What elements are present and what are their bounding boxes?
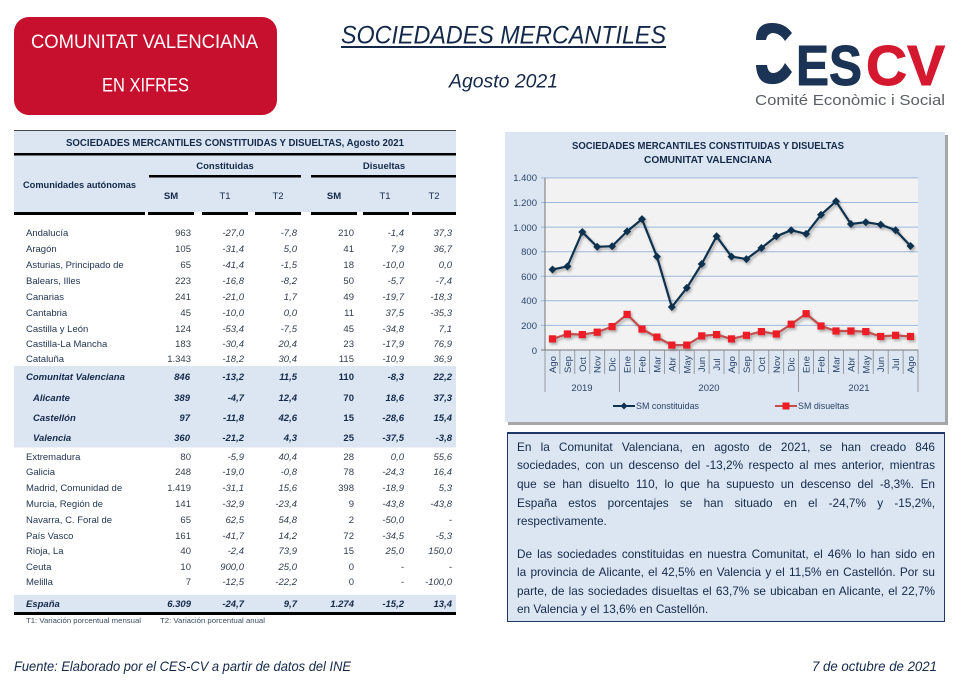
row: Castilla y León: -53,4 [222,324,244,335]
row: Galicia: -0,8 [281,467,298,478]
row: Valencia: 25 [343,433,355,444]
row: Ceuta: - [449,562,452,573]
row: Aragón: Aragón [26,244,57,255]
row: Cantabria [26,308,453,319]
table header: Constituidas [196,161,254,172]
row: Cataluña: Cataluña [26,354,65,365]
row: Extremadura: -5,9 [228,452,245,463]
row: Melilla [26,577,453,588]
row: Valencia: -37,5 [382,433,405,444]
row: Alicante: 12,4 [278,393,298,404]
row: Ceuta: 10 [180,562,191,573]
row: Galicia: -24,3 [382,467,405,478]
row: Valencia: -3,8 [436,433,453,444]
row: Canarias: 241 [175,292,191,303]
row: Andalucía: 963 [175,228,191,239]
row: Canarias [26,292,453,303]
row: España: 9,7 [284,599,298,610]
row: Castilla-La Mancha: -30,4 [222,339,244,350]
row: Madrid: 5,3 [439,483,453,494]
row: País Vasco: 14,2 [278,531,298,542]
row: Castellón [33,413,453,424]
row: Extremadura: 80 [180,452,191,463]
x axis month labels: Jun [876,357,887,372]
row: Comunitat Valenciana [26,372,453,383]
text box: commentary: respectivamente. [517,514,607,528]
x axis month labels: May [682,355,693,373]
row: Asturias: 18 [343,260,354,271]
shaded block: Comunitat Valenciana [14,366,456,448]
row: Castilla-La Mancha: 76,9 [434,339,453,350]
row: Rioja: -2,4 [228,546,244,557]
legend: SM disueltas [798,401,849,411]
row: Cataluña: 1.343 [167,354,191,365]
row: Andalucía: 37,3 [434,228,453,239]
row: Asturias: -1,5 [281,260,298,271]
row: Canarias: 1,7 [284,292,298,303]
row: Comunitat Valenciana: -8,3 [388,372,405,383]
table header: T1 [219,191,231,202]
row: Melilla: Melilla [26,577,54,588]
row: Valencia: Valencia [33,433,71,444]
row: Cantabria: -35,3 [430,308,453,319]
text box: commentary: parte, de las sociedades disueltas el 63,7% se ubicaban en Alicante, el 22,7% [517,584,935,598]
x axis month labels: Feb [816,356,828,373]
row: Castilla-La Mancha [26,339,453,350]
row: Madrid: 15,6 [278,483,298,494]
y axis labels: 1.400 [513,173,537,184]
row: Cantabria: Cantabria [26,308,68,319]
y axis labels: 0 [532,346,537,357]
row: Castellón: -28,6 [382,413,405,424]
y axis labels: 1.200 [513,198,537,209]
row: Ceuta: 900,0 [220,562,245,573]
row: Madrid: -31,1 [222,483,244,494]
y axis labels: 600 [521,272,537,283]
row: País Vasco [26,531,453,542]
row: Castilla-La Mancha: Castilla-La Mancha [26,339,108,350]
row: Canarias: -21,0 [222,292,245,303]
row: Rioja: 15 [343,546,354,557]
x axis month labels: Jul [712,358,723,371]
row: Comunitat Valenciana: 22,2 [432,372,453,383]
row: Extremadura: 40,4 [278,452,297,463]
row: Castilla y León [26,324,452,335]
row: Aragón: 41 [343,244,354,255]
text box: commentary: En la Comunitat Valenciana, en agosto de 2021, se han creado 846 [517,440,935,454]
row: Murcia [26,499,453,510]
row: Castilla y León: Castilla y León [26,324,88,335]
row: Valencia: 360 [174,433,191,444]
table header: T2 [428,191,440,202]
y axis labels: 400 [521,296,537,307]
text box: commentary: en Valencia y el 13,6% en Castellón. [517,602,708,616]
row: Valencia [33,433,453,444]
row: Baleares: -16,8 [222,276,245,287]
row: Andalucía: -1,4 [388,228,404,239]
x axis year labels: 2019 [571,383,593,394]
row: Valencia: -21,2 [222,433,245,444]
x axis month labels: Nov [772,356,783,373]
row: Galicia: 16,4 [434,467,452,478]
row: Castilla-La Mancha: 23 [343,339,354,350]
row: Castellón: 15 [343,413,355,424]
row: Castellón: 15,4 [434,413,453,424]
x axis month labels: Jul [891,358,902,371]
row: Murcia: Murcia, Región de [26,499,103,510]
table header: Comunidades autónomas [23,180,136,191]
x axis month labels: Dic [608,357,619,371]
row: País Vasco: País Vasco [26,531,73,542]
chart title: SOCIEDADES MERCANTILES CONSTITUIDAS Y DISUELTAS [572,141,844,152]
row: Andalucía: Andalucía [26,228,69,239]
row: Murcia: -23,4 [275,499,297,510]
y axis labels [513,173,537,357]
legend [613,401,849,411]
row: Madrid [26,483,453,494]
row: Alicante: 389 [174,393,191,404]
row: España: -15,2 [382,599,405,610]
row: Cantabria: 45 [180,308,191,319]
row: Andalucía: -7,8 [281,228,298,239]
legend: SM constituidas [636,401,699,411]
row: Extremadura: 28 [343,452,354,463]
x axis month labels: Ago [906,356,917,373]
text box: commentary: que se han disuelto 110, lo que ha supuesto un descenso del -8,3%. En [517,477,935,491]
x axis month labels: Sep [742,356,753,373]
x axis month labels: Feb [638,356,648,373]
x axis month labels: Oct [578,357,589,372]
row: Rioja: Rioja, La [26,546,64,557]
row: Castilla y León: 45 [343,324,354,335]
row: Castilla y León: 124 [175,324,191,335]
row: Baleares [26,276,452,287]
row: Baleares: Balears, Illes [26,276,81,287]
plot area and gridlines [541,178,918,350]
table footnote [26,616,265,625]
row: Madrid: Madrid, Comunidad de [26,483,122,494]
chart title [572,141,844,166]
x axis year labels [571,383,870,394]
x axis month labels: Sep [563,356,574,373]
table header: T1 [379,191,391,202]
row: Aragón: 7,9 [391,244,405,255]
row: Cataluña [26,354,453,365]
x axis year labels: 2021 [848,383,870,394]
row: Andalucía [26,228,453,239]
x axis month labels [545,350,918,392]
row: Navarra: 65 [180,515,191,526]
row: Cantabria: 11 [344,308,354,319]
x axis month labels: May [861,355,872,373]
y axis labels: 800 [521,247,537,258]
row: Navarra [26,515,452,526]
row: Galicia: 248 [175,467,191,478]
row: Baleares: -8,2 [281,276,298,287]
row: Baleares: 50 [343,276,354,287]
row: Galicia: -19,0 [222,467,245,478]
row: Melilla: -100,0 [425,577,453,588]
row: Castellón: 42,6 [278,413,298,424]
row: Comunitat Valenciana: 846 [174,372,191,383]
logo: CES-CV: ES [796,34,862,98]
row: Cantabria: 0,0 [284,308,298,319]
row: Castilla-La Mancha: -17,9 [382,339,405,350]
row: País Vasco: 72 [343,531,354,542]
row: Andalucía: -27,0 [222,228,245,239]
row: Cataluña: 36,9 [434,354,453,365]
row: Castilla-La Mancha: 20,4 [278,339,297,350]
table footnote: T2: Variación porcentual anual [160,616,265,625]
row: Aragón [26,244,453,255]
row: Rioja: 150,0 [428,546,453,557]
row: Navarra: -50,0 [382,515,405,526]
row: Comunitat Valenciana: 11,5 [279,372,298,383]
row: Comunitat Valenciana: 110 [339,372,354,383]
series: SM disueltas [549,310,914,349]
row: País Vasco: -5,3 [436,531,453,542]
row: Castellón: -11,8 [223,413,245,424]
row: Rioja: 25,0 [384,546,405,557]
row: Asturias: Asturias, Principado de [26,260,124,271]
row: Castellón: 97 [179,413,191,424]
row: Castellón: Castellón [33,413,76,424]
row: Rioja: 73,9 [278,546,298,557]
x axis month labels: Oct [757,357,768,372]
x axis month labels: Mar [652,356,663,373]
x axis month labels: Ago [548,356,559,373]
row: Castilla y León: 7,1 [439,324,452,335]
row: Alicante [32,393,453,404]
row: Murcia: 141 [175,499,191,510]
row: Extremadura: 0,0 [391,452,405,463]
row: Murcia: 9 [349,499,354,510]
series: SM constituidas [548,197,914,311]
row: España: 6.309 [167,599,192,610]
row: Cataluña: 30,4 [278,354,297,365]
x axis month labels: Nov [593,356,604,373]
row: Canarias: -18,3 [430,292,453,303]
x axis month labels: Ago [727,356,738,373]
text box: commentary: De las sociedades constituidas en nuestra Comunitat, el 46% lo han sido en [517,547,935,561]
row: Rioja: 40 [180,546,191,557]
x axis month labels: Abr [846,357,857,372]
row: Asturias: -41,4 [222,260,244,271]
panel: line chart [505,132,948,425]
row: Comunitat Valenciana: -13,2 [222,372,245,383]
x axis month labels: Jun [697,357,708,372]
row: Aragón: -31,4 [222,244,244,255]
logo: CES-CV: Comité Econòmic i Social [755,92,945,109]
row: España: -24,7 [222,599,245,610]
row: Navarra: - [449,515,452,526]
row: Canarias: Canarias [26,292,64,303]
table: sociedades mercantiles por comunidad [14,130,456,625]
row: Murcia: -43,8 [382,499,405,510]
row: Cantabria: 37,5 [386,308,405,319]
row: Navarra: 62,5 [226,515,245,526]
row: Aragón: 5,0 [284,244,298,255]
row: Andalucía: 210 [338,228,354,239]
row: Madrid: 1.419 [167,483,191,494]
text box: commentary: la provincia de Alicante, el 42,5% en Valencia y el 11,5% en Castellón. Por su [517,565,935,579]
row: Alicante: 70 [343,393,354,404]
row: Cataluña: -10,9 [382,354,405,365]
row: Ceuta: 0 [349,562,354,573]
row: Melilla: -12,5 [222,577,245,588]
y axis labels: 1.000 [513,223,537,234]
text box: commentary [507,432,945,622]
subtitle: date: Agosto 2021 [448,72,558,92]
row: Canarias: 49 [343,292,354,303]
logo: CES-CV [755,23,945,109]
row: Alicante: 18,6 [386,393,405,404]
row: Melilla: - [401,577,404,588]
row: Melilla: 0 [349,577,354,588]
row: País Vasco: -34,5 [382,531,405,542]
footer: source: Fuente: Elaborado por el CES-CV a partir de datos del INE [14,658,352,674]
row: Alicante: Alicante [32,393,71,404]
row: Aragón: 105 [175,244,191,255]
row: Melilla: 7 [186,577,191,588]
row: Castilla y León: -7,5 [281,324,298,335]
badge: Comunitat Valenciana en xifres [14,17,277,115]
row: Galicia: Galicia [26,467,56,478]
row: Navarra: 54,8 [278,515,298,526]
x axis month labels: Abr [667,357,678,372]
table header: SM [327,191,341,202]
row: Galicia [26,467,452,478]
row: País Vasco: -41,7 [222,531,245,542]
row: Valencia: 4,3 [283,433,298,444]
row: Extremadura [26,452,453,463]
row: Murcia: -43,8 [430,499,453,510]
row: Asturias: 0,0 [439,260,453,271]
row: Baleares: 223 [175,276,191,287]
row: Navarra: Navarra, C. Foral de [26,515,112,526]
table header: T2 [272,191,284,202]
row: Castilla y León: -34,8 [382,324,405,335]
row: Castilla-La Mancha: 183 [175,339,191,350]
row: Cantabria: -10,0 [222,308,245,319]
badge: Comunitat Valenciana en xifres: COMUNITAT VALENCIANA [31,31,258,53]
row: Melilla: -22,2 [275,577,298,588]
text box: commentary: España estos porcentajes se han situado en el -24,7% y -15,2%, [517,496,935,510]
row: Galicia: 78 [343,467,354,478]
x axis year labels: 2020 [698,383,720,394]
table header [14,130,456,215]
row: Comunitat Valenciana: Comunitat Valenciana [26,372,125,383]
row: Baleares: -7,4 [436,276,452,287]
row: Aragón: 36,7 [434,244,453,255]
row: Alicante: -4,7 [228,393,245,404]
row: Madrid: -18,9 [382,483,405,494]
row: Asturias: 65 [180,260,191,271]
x axis month labels: Ene [802,356,813,373]
row: Murcia: -32,9 [222,499,245,510]
row: España: 13,4 [434,599,453,610]
row: País Vasco: 161 [175,531,191,542]
row: Baleares: -5,7 [388,276,405,287]
row: España: 1.274 [330,599,355,610]
badge: Comunitat Valenciana en xifres: EN XIFRES [102,74,189,96]
row: Cataluña: -18,2 [222,354,245,365]
row: Ceuta: 25,0 [278,562,298,573]
row: Ceuta: Ceuta [26,562,52,573]
row: Rioja [26,546,453,557]
title: SOCIEDADES MERCANTILES [341,22,666,50]
footer: date: 7 de octubre de 2021 [812,658,937,674]
row: Madrid: 398 [338,483,354,494]
table header: SM [164,191,178,202]
text box: commentary: sociedades, con un descenso del -13,2% respecto al mes anterior, mientras [517,458,935,472]
row: Asturias [26,260,453,271]
row: España [14,595,456,615]
row: Cataluña: 115 [339,354,354,365]
table header: Disueltas [363,161,405,172]
row: Asturias: -10,0 [382,260,405,271]
x axis month labels: Mar [832,356,842,373]
table footnote: T1: Variación porcentual mensual [26,616,141,625]
row: España: España [26,599,60,610]
y axis labels: 200 [521,321,537,332]
x axis month labels: Dic [787,357,798,371]
x axis month labels: Ene [623,356,634,373]
row: Extremadura: 55,6 [434,452,453,463]
row: Canarias: -19,7 [382,292,405,303]
logo: CES-CV: CV [866,34,945,98]
chart title: COMUNITAT VALENCIANA [644,155,772,166]
row: Extremadura: Extremadura [26,452,81,463]
row: Ceuta: - [401,562,404,573]
table header: SOCIEDADES MERCANTILES CONSTITUIDAS Y DISUELTAS, Agosto 2021 [66,138,404,149]
row: Navarra: 2 [349,515,354,526]
row: Ceuta [26,562,452,573]
row: Alicante: 37,3 [434,393,453,404]
